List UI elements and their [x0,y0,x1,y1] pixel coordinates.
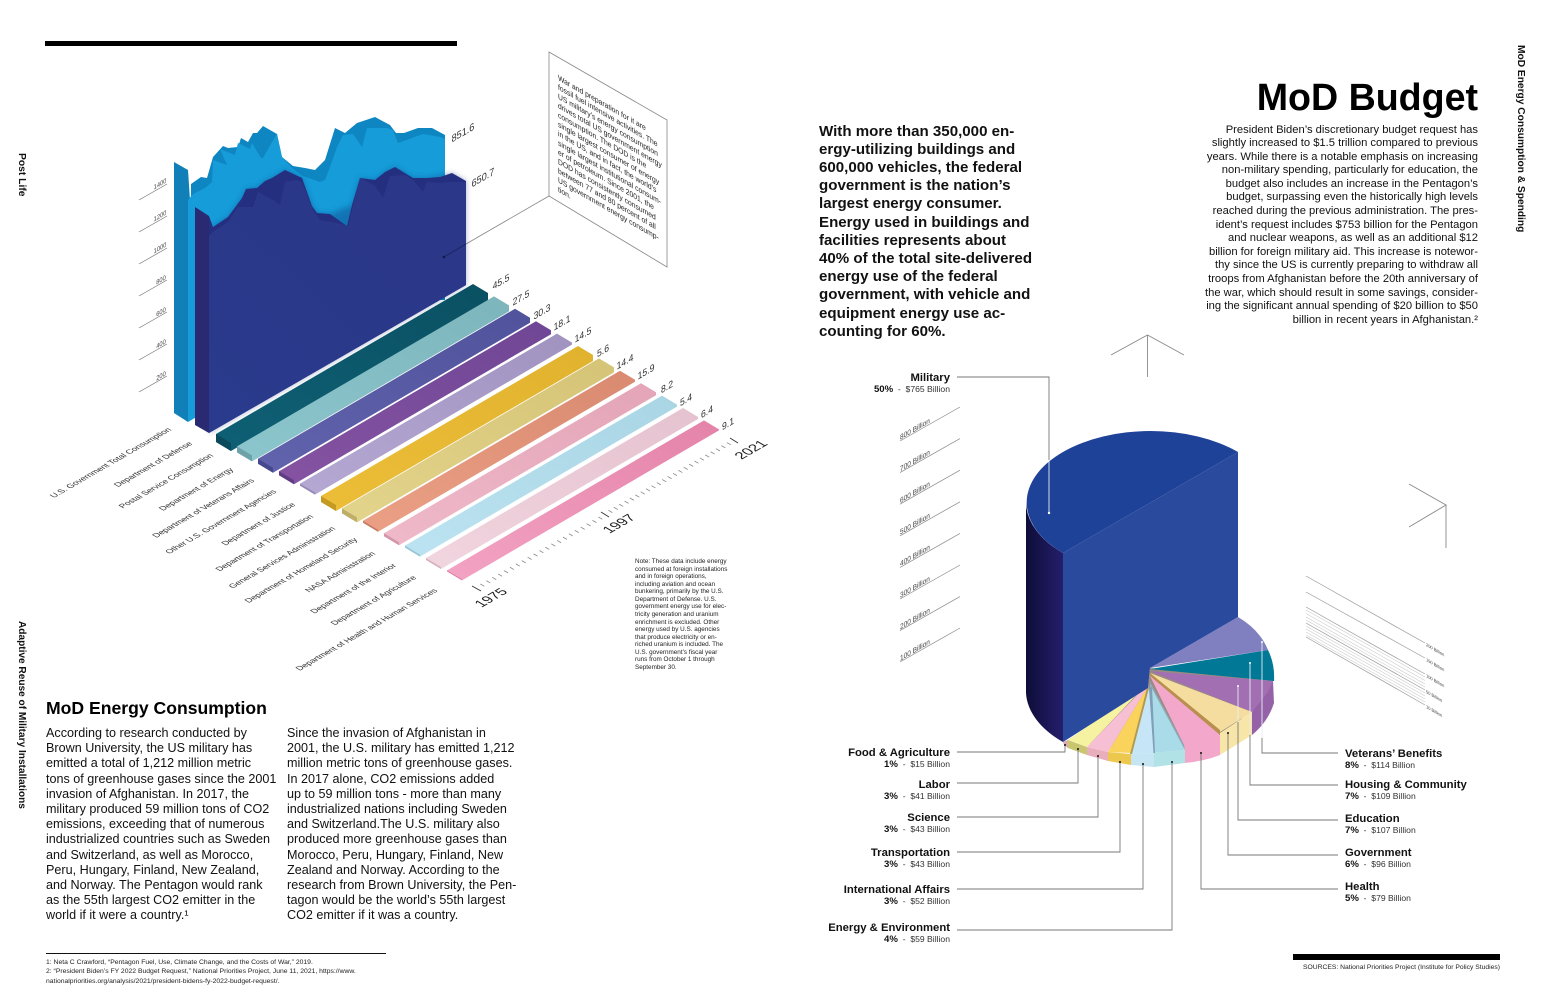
text block: federal energy statement: With more than 350,000 en- [819,122,1014,140]
callout box: war and preparation [549,52,667,267]
callout box: war and preparation: drives total US government energy [558,101,662,170]
text block: column one: Peru, Hungary, Finland, New Zealand, [46,863,259,877]
text block: column two: industrialized nations including Sweden [287,802,507,816]
pie value axis left: 100 Billion [900,637,930,663]
wall: Department of Defense [195,167,466,433]
text block: column one: industrialized countries such as Sweden [46,832,270,846]
agency labels: Department of Agriculture [328,574,419,626]
text block: chart note: and in foreign operations, [635,573,707,580]
text block: column two: and Switzerland.The U.S. military also [287,817,500,831]
label: Military: Military [910,372,951,384]
text block: budget description [1205,124,1478,326]
agency labels: Department of Transportation [213,513,316,572]
side label: Adaptive Reuse of Military Installations: Adaptive Reuse of Military Installations [16,621,27,809]
text block: footnotes [46,958,356,984]
label: Transportation: Transportation [871,847,950,859]
callout box: war and preparation: fossil fuel intensive activities. The [558,82,658,149]
text block: chart note: enrichment is excluded. Other [635,618,719,626]
text block: budget description: and nuclear weapons, as well as an additional $12 [1228,232,1478,244]
bar: Department of Health and Human Services [447,420,719,580]
slice: Transportation [1108,688,1149,765]
text block: chart note: September 30. [635,664,677,671]
bar: Department of the Interior [405,396,677,557]
label: Government: 6% - $96 Billion [1345,859,1411,870]
bar value labels: 15.9 [638,362,655,383]
icon: right axis arrow [1409,484,1446,548]
callout box: war and preparation: US military’s energy consumption [558,92,658,158]
text block: federal energy statement: equipment energy use ac- [819,305,1005,322]
line: callout leader [466,196,549,244]
callout box: war and preparation: between 77 and 80 percent of all [558,166,656,232]
text block: chart note: Department of Defense. U.S. [635,596,716,603]
bottom right black rule [1293,954,1500,960]
pie value axis left: 800 Billion [900,416,930,442]
bar value labels: 9.1 [722,415,734,433]
text block: column one: emissions, exceeding that of numerous [46,817,264,831]
bar: Department of Energy [237,296,509,461]
y axis ticks: 600 [156,306,166,319]
wall value labels: 650.7 [472,166,495,191]
text block: column two: research from Brown University, the Pen- [287,878,516,892]
bar value labels: 14.5 [575,325,592,346]
text block: federal energy statement [819,122,1032,340]
slice: Military front [1063,452,1238,742]
y axis ticks: 400 [156,338,166,351]
text block: column two: produced more greenhouse gases than [287,832,507,846]
text block: column two: In 2017 alone, CO2 emissions added [287,772,494,786]
text block: footnotes: nationalpriorities.org/analysis/2021/president-bidens-fy-2022-budget-request/. [46,978,280,984]
text block: chart note: government energy use for elec- [635,603,726,610]
footnote rule [46,953,386,954]
slice: Labor [1068,688,1143,755]
label: Health: 5% - $79 Billion [1345,893,1411,904]
label: Housing and Community [1345,779,1467,802]
slice: Science [1087,688,1147,761]
text block: column one: and Norway. The Pentagon would rank [46,878,263,892]
text block: chart note: consumed at foreign installations [635,566,727,573]
pie value axis left [900,407,960,663]
text block: budget description: ing the significant annual spending of $20 billion to $50 [1206,300,1478,312]
year axis: 1975 [470,586,511,609]
bar: Department of Justice [300,334,572,495]
text block: budget description: troops from Afghanistan before the 20th anniversary of [1208,273,1478,285]
bar value labels: 27.5 [513,288,530,309]
bar value labels: 18.1 [554,313,571,334]
text block: chart note: bunkering, primarily by the U.S. [635,588,724,595]
label: Energy and Environment: 4% - $59 Billion [884,934,950,945]
text block: column two: Morocco, Peru, Hungary, Finland, New [287,848,503,862]
callout box: war and preparation: DOD has consistently consumed [558,157,656,222]
text block: column one [46,726,276,922]
agency labels: Department of Homeland Security [242,536,360,604]
text block: budget description: President Biden’s discretionary budget request has [1226,124,1478,136]
callout box: war and preparation: tion. [558,185,571,201]
label: Energy and Environment: Energy & Environment [828,922,950,934]
label: Health: Health [1345,881,1380,893]
slice: Veterans' Benefits [1150,617,1268,668]
text block: column two: Since the invasion of Afghanistan in [287,726,486,740]
text block: column two: million metric tons of greenhouse gases. [287,756,512,770]
slice: Education [1150,671,1274,735]
bar value labels: 5.6 [597,342,609,360]
text block: chart note: tricity generation and uranium [635,611,719,618]
text block: column one: tons of greenhouse gases since the 2001 [46,772,276,786]
text block: chart note: including aviation and ocean [635,581,715,588]
label: Energy and Environment [828,922,950,945]
label: Food and Agriculture: 1% - $15 Billion [884,759,950,770]
label: International Affairs: 3% - $52 Billion [884,896,950,907]
y axis ticks: 200 [156,370,166,383]
year axis: 1997 [598,512,639,535]
label: Labor: 3% - $41 Billion [884,791,950,802]
agency labels: Other U.S. Government Agencies [162,488,279,555]
text block: budget description: billion in recent years in Afghanistan.² [1293,314,1478,326]
text block: chart note: energy used by U.S. agencies [635,626,720,633]
slice: Health [1150,676,1220,763]
text block: column two: tagon would be the world’s 55th largest [287,893,505,907]
text block: column two [287,726,516,922]
pie value axis left: 500 Billion [900,511,930,537]
callout box: war and preparation: War and preparation for it are [558,73,646,133]
text block: federal energy statement: government, with vehicle and [819,286,1030,303]
text block: budget description: the war, which should result in some savings, consider- [1205,287,1478,299]
label: Labor [884,779,951,802]
callout box: war and preparation: consumption. The DOD is the [558,110,646,170]
slice: Energy and Environment [1150,682,1185,767]
callout lines [957,377,1338,930]
text block: chart note: that produce electricity or en- [635,634,717,641]
bar: Department of Transportation [321,346,593,511]
bar value labels [493,272,734,433]
label: Government [1345,847,1412,870]
text block: column two: up to 59 million tons - more than many [287,787,501,801]
agency labels: Department of Defense [111,440,195,488]
text block: budget description: reached during the previous administration. The pres- [1213,205,1478,217]
agency labels: Department of the Interior [307,562,399,615]
text block: column one: According to research conducted by [46,726,247,740]
text block: column one: and Switzerland, as well as Morocco, [46,848,253,862]
label: Health [1345,881,1411,904]
bar value labels: 14.4 [617,352,634,373]
bar: Postal Service Consumption [216,284,488,451]
agency labels: Postal Service Consumption [116,452,216,510]
pie value axis left: 300 Billion [900,574,930,600]
slice: Military top [1027,431,1238,553]
agency labels: Department of Veterans Affairs [149,477,257,539]
bar value labels: 30.3 [534,302,551,323]
text block: federal energy statement: energy use of the federal [819,268,998,285]
agency labels: General Services Administration [226,525,338,590]
pie value axis left: 700 Billion [900,447,930,474]
y axis ticks: 1000 [154,241,167,256]
text block: budget description: slightly increased to $1.5 trillion compared to previous [1212,137,1478,149]
bar: Other U.S. Government Agencies [279,321,551,484]
text block: chart note: runs from October 1 through [635,656,715,663]
bar value labels: 6.4 [701,403,713,421]
label: Government: Government [1345,847,1412,859]
text block: column one: world if it were a country.¹ [46,908,189,922]
pie value axis left: 400 Billion [900,542,930,568]
text block: federal energy statement: ergy-utilizing buildings and [819,141,1015,158]
label: Housing and Community: 7% - $109 Billion [1345,791,1416,802]
text block: chart note: U.S. government’s fiscal year [635,649,717,656]
text block: federal energy statement: government is the nation’s [819,177,1010,194]
y axis ticks: 1200 [154,209,167,224]
label: Veterans' Benefits: Veterans’ Benefits [1345,748,1442,760]
bar: Department of Veterans Affairs [258,309,530,473]
text block: federal energy statement: 40% of the total site-delivered [819,250,1032,267]
text block: footnotes: 1: Neta C Crawford, “Pentagon Fuel, Use, Climate Change, and the Costs of War,” 2019. [46,958,313,966]
text block: column one: Brown University, the US military has [46,741,252,755]
year axis [470,438,771,609]
label: Labor: Labor [919,779,951,791]
bar: NASA Administration [384,383,656,545]
agency labels: U.S. Government Total Consumption [47,426,174,499]
text block: column one: as the 55th largest CO2 emitter in the [46,893,255,907]
callout box: war and preparation: in the US, and in fact, the world’s [558,129,656,195]
text block: footnotes: 2: “President Biden’s FY 2022 Budget Request,” National Priorities Project, June 11, 2021, https://www. [46,968,356,975]
label: Education: Education [1345,813,1400,825]
text block: column two: Zealand and Norway. According to the [287,863,500,877]
icon: top axis arrow [1111,335,1184,377]
wall value labels [452,121,495,191]
slice: International Affairs [1131,687,1155,767]
text block: federal energy statement: 600,000 vehicles, the federal [819,159,1022,176]
text block: budget description: non-military spending, particularly for education, the [1222,164,1478,176]
title: MoD Budget [1257,76,1478,118]
y axis ticks: 800 [156,274,166,287]
callout box: war and preparation: single largest consumer of energy [558,119,659,187]
y axis ticks [139,177,167,392]
label: Education: 7% - $107 Billion [1345,825,1416,836]
side label: MoD Energy Consumption and Spending: MoD Energy Consumption & Spending [1515,45,1526,232]
slice: Housing and Community [1150,650,1274,681]
bar value labels: 45.5 [493,272,510,293]
bar: Department of Homeland Security [363,371,635,532]
agency labels [47,426,440,672]
text block: sources: SOURCES: National Priorities Project (Institute for Policy Studies) [1303,964,1500,971]
label: Military: 50% - $765 Billion [874,384,950,395]
text block: federal energy statement: Energy used in buildings and [819,214,1030,231]
label: Veterans' Benefits [1345,748,1442,771]
text block: chart note: riched uranium is included. The [635,641,723,648]
callout box: war and preparation: single largest institutional consum- [558,138,661,207]
text block: column one: invasion of Afghanistan. In 2017, the [46,787,249,801]
text block: budget description: budget also includes an increase in the Pentagon’s [1226,178,1478,190]
year axis: 2021 [730,438,771,461]
slice: Food and Agriculture [1063,740,1068,748]
text block: budget description: thy since the US is currently preparing to withdraw all [1215,259,1478,271]
label: Veterans' Benefits: 8% - $114 Billion [1345,760,1415,771]
pie value axis right [1306,576,1445,719]
bar value labels: 5.4 [680,391,692,409]
text block: chart note: Note: These data include energy [635,558,727,565]
text block: column one: emitted a total of 1,212 million metric [46,756,251,770]
text block: chart note [635,558,728,671]
text block: federal energy statement: largest energy consumer. [819,195,1002,212]
callout box: war and preparation: er of petroleum. Since 2001, the [558,147,654,212]
label: Education [1345,813,1416,836]
text block: budget description: budget, surpassing even the historically high levels [1226,191,1478,203]
pie value axis right: 200 Billion [1426,642,1445,658]
label: Transportation [871,847,950,870]
agency labels: Department of Energy [156,466,236,512]
label: International Affairs: International Affairs [844,884,950,896]
label: Science: Science [907,812,950,824]
pie value axis right: 10 Billion [1426,704,1442,719]
text block: column two: 2001, the U.S. military has emitted 1,212 [287,741,515,755]
y axis ticks: 1400 [154,177,167,192]
callout box: war and preparation: US government energy consump- [558,175,659,243]
label: Science: 3% - $43 Billion [884,824,950,835]
label: Housing and Community: Housing & Community [1345,779,1467,791]
heading: MoD Energy Consumption: MoD Energy Consumption [46,698,267,718]
agency labels: Department of Health and Human Services [293,587,440,672]
text block: column two: CO2 emitter if it was a country. [287,908,458,922]
bar: Department of Agriculture [426,408,698,569]
label: Food and Agriculture: Food & Agriculture [848,747,950,759]
text block: budget description: ident’s request includes $753 billion for the Pentagon [1216,219,1478,231]
slice: Government [1150,673,1252,755]
label: Military [874,372,951,395]
wall: U.S. government total consumption [174,117,445,422]
bar: General Services Administration [342,358,614,522]
pie value axis right: 150 Billion [1426,657,1445,673]
wall value labels: 851.6 [452,121,475,146]
pie chart: discretionary budget [1026,431,1274,767]
text block: federal energy statement: counting for 60%. [819,323,946,340]
agency labels: NASA Administration [302,550,378,594]
top black rule [45,41,457,46]
pie value axis left: 600 Billion [900,479,930,505]
pie value axis right: 100 Billion [1426,673,1445,689]
agency labels: Department of Justice [219,501,298,547]
label: Science [884,812,950,835]
text block: column one: military produced 59 million tons of CO2 [46,802,269,816]
label: Food and Agriculture [848,747,950,770]
side label: Post Life: Post Life [16,153,27,197]
text block: budget description: billion for foreign military aid. This increase is notewor- [1209,246,1478,258]
pie value axis left: 200 Billion [900,605,930,632]
text block: federal energy statement: facilities represents about [819,232,1006,249]
bar value labels: 8.2 [661,378,673,396]
label: International Affairs [844,884,950,907]
label: Transportation: 3% - $43 Billion [884,859,950,870]
chart: isometric energy consumption by agency [47,117,771,672]
slice: Military side [1026,502,1063,742]
text block: budget description: years. While there is a notable emphasis on increasing [1207,151,1478,163]
pie value axis right: 50 Billion [1426,689,1442,704]
fan underlay [1068,668,1273,752]
